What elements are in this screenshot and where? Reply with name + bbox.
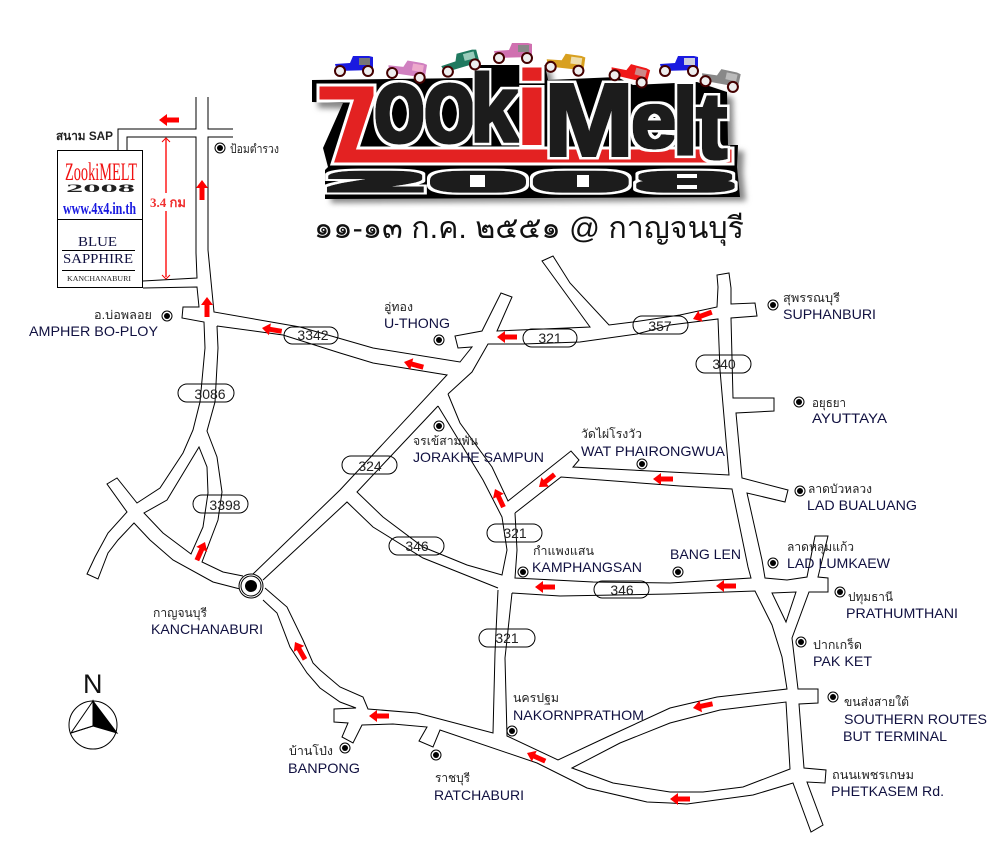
location labels: ถนนเพชรเกษม: [832, 768, 914, 782]
jeep: green: [439, 49, 481, 78]
route badges: 321: [503, 525, 527, 541]
location labels: วัดไผ่โรงวัว: [581, 427, 642, 441]
route badges: 3086: [194, 386, 226, 402]
logo: ZookiMelt 2008: M: [544, 63, 634, 178]
location labels: ปทุมธานี: [848, 590, 893, 605]
route badges: 357: [648, 318, 672, 334]
logo: ZookiMelt 2008: l: [672, 69, 698, 175]
logo: ZookiMelt 2008: [312, 44, 746, 203]
location labels: BANG LEN: [670, 546, 741, 562]
location labels: SOUTHERN ROUTES: [844, 711, 987, 727]
location labels: NAKORNPRATHOM: [513, 707, 644, 723]
jeep: yellow: [545, 51, 585, 76]
location labels: AYUTTAYA: [812, 410, 888, 426]
hotel sign: Blue Sapphire: www.4x4.in.th: [63, 199, 136, 218]
direction arrows: [159, 114, 736, 805]
location labels: [29, 129, 987, 803]
location labels: PRATHUMTHANI: [846, 605, 958, 621]
hotel sign: Blue Sapphire: BLUE: [78, 235, 117, 250]
route badges: 321: [495, 630, 519, 646]
jeep: gray: [700, 65, 741, 93]
jeep: pink top: [494, 43, 532, 63]
route badges: 346: [610, 582, 634, 598]
route badges: 346: [405, 538, 429, 554]
icon: Kanchanaburi roundabout: [239, 574, 263, 598]
jeep: blue: [335, 56, 373, 76]
location labels: สุพรรณบุรี: [783, 291, 841, 306]
location labels: WAT PHAIRONGWUA: [581, 443, 726, 459]
route badges: 321: [538, 330, 562, 346]
logo: ZookiMelt 2008: k: [470, 55, 518, 163]
hotel sign: Blue Sapphire: [57, 150, 143, 288]
north compass: [69, 669, 117, 749]
route badges: 3342: [297, 327, 329, 343]
jeep: red: [608, 59, 650, 89]
logo: ZookiMelt 2008: e: [631, 77, 677, 164]
location labels: อ.บ่อพลอย: [94, 308, 152, 322]
location labels: จรเข้สามพัน: [413, 434, 478, 448]
location labels: LAD LUMKAEW: [787, 555, 891, 571]
hotel sign: Blue Sapphire: 2008: [66, 181, 135, 195]
location labels: อยุธยา: [812, 396, 846, 411]
road network: [87, 97, 828, 832]
route badges: [178, 316, 751, 647]
location labels: ปากเกร็ด: [813, 637, 862, 652]
route badges: 340: [712, 356, 736, 372]
location markers: [162, 143, 845, 760]
logo: ZookiMelt 2008: o: [373, 44, 426, 165]
location labels: บ้านโป่ง: [289, 744, 333, 758]
location labels: BANPONG: [288, 760, 360, 776]
jeep: pink: [386, 57, 427, 84]
location labels: ลาดบัวหลวง: [808, 482, 872, 496]
location labels: ป้อมตำรวง: [230, 142, 279, 156]
hotel sign: Blue Sapphire: KANCHANABURI: [67, 275, 132, 283]
location labels: ขนส่งสายใต้: [844, 695, 909, 709]
logo: ZookiMelt 2008: t: [696, 73, 727, 178]
hotel sign: Blue Sapphire: ZookiMELT: [65, 159, 137, 186]
location labels: กาญจนบุรี: [153, 606, 208, 621]
distance marker: 3.4 km: 3.4 กม: [150, 195, 186, 210]
hotel sign: Blue Sapphire: SAPPHIRE: [63, 252, 133, 267]
location labels: ราชบุรี: [435, 771, 471, 786]
route badges: 324: [358, 458, 382, 474]
location labels: สนาม SAP: [56, 129, 113, 143]
north compass: N: [83, 669, 102, 699]
distance marker: 3.4 km: [150, 138, 186, 279]
route badges: 3398: [209, 497, 241, 513]
logo: ZookiMelt 2008: o: [423, 44, 476, 165]
location labels: กำแพงแสน: [533, 544, 594, 558]
location labels: PHETKASEM Rd.: [831, 783, 944, 799]
logo: ZookiMelt 2008: i: [516, 51, 548, 166]
location labels: SUPHANBURI: [783, 306, 876, 322]
location labels: BUT TERMINAL: [843, 728, 947, 744]
logo: ZookiMelt 2008: 2008: [336, 167, 725, 197]
location labels: KANCHANABURI: [151, 621, 263, 637]
location labels: อู่ทอง: [384, 300, 413, 315]
location labels: U-THONG: [384, 315, 450, 331]
location labels: KAMPHANGSAN: [532, 559, 642, 575]
location labels: AMPHER BO-PLOY: [29, 323, 159, 339]
location labels: นครปฐม: [513, 691, 559, 705]
location labels: PAK KET: [813, 653, 872, 669]
event date line: ๑๑-๑๓ ก.ค. ๒๕๕๑ @ กาญจนบุรี: [314, 212, 744, 247]
jeep: blue right: [660, 56, 698, 76]
location labels: ลาดหลุมแก้ว: [787, 540, 854, 555]
location labels: RATCHABURI: [434, 787, 524, 803]
location labels: LAD BUALUANG: [807, 497, 917, 513]
location labels: JORAKHE SAMPUN: [413, 449, 544, 465]
